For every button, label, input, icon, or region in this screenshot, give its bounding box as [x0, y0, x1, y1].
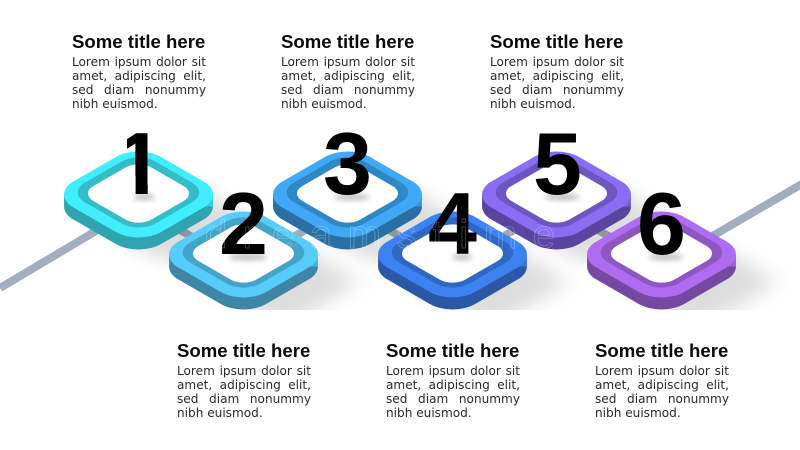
tile shadows	[128, 188, 774, 310]
text block 4: sed diam nonummy	[386, 392, 520, 406]
text block 2	[177, 340, 311, 420]
tile 6	[574, 204, 749, 317]
text block 6: Some title here	[595, 340, 728, 361]
tile 1	[51, 144, 226, 257]
number 1: 1	[115, 114, 164, 213]
text block 5: Lorem ipsum dolor sit	[490, 55, 624, 69]
text block 5: amet, adipiscing elit,	[490, 69, 624, 83]
text block 6: Lorem ipsum dolor sit	[595, 364, 729, 378]
text block 3: amet, adipiscing elit,	[281, 69, 415, 83]
tile 3	[260, 144, 435, 257]
text block 4: amet, adipiscing elit,	[386, 378, 520, 392]
tile 4	[365, 204, 540, 317]
text block 2: nibh euismod.	[177, 406, 263, 420]
text block 3: Some title here	[281, 31, 414, 52]
text block 5: sed diam nonummy	[490, 83, 624, 97]
text block 5: nibh euismod.	[490, 97, 576, 111]
text block 3	[281, 31, 415, 111]
text block 6: nibh euismod.	[595, 406, 681, 420]
text block 6: sed diam nonummy	[595, 392, 729, 406]
text block 4: Lorem ipsum dolor sit	[386, 364, 520, 378]
text block 4: nibh euismod.	[386, 406, 472, 420]
text block 5: Some title here	[490, 31, 623, 52]
watermark: dreamstime	[205, 213, 555, 257]
text block 1: sed diam nonummy	[72, 83, 206, 97]
text block 3: nibh euismod.	[281, 97, 367, 111]
digit shadows	[133, 194, 684, 260]
number 4: 4	[428, 174, 477, 273]
text block 6: amet, adipiscing elit,	[595, 378, 729, 392]
text block 1: nibh euismod.	[72, 97, 158, 111]
text block 1	[72, 31, 206, 111]
number 3: 3	[323, 114, 372, 213]
number 5: 5	[533, 114, 582, 213]
text block 2: Some title here	[177, 340, 310, 361]
text block 2: amet, adipiscing elit,	[177, 378, 311, 392]
tile 5	[469, 144, 644, 257]
text block 3: Lorem ipsum dolor sit	[281, 55, 415, 69]
tile 2	[156, 204, 331, 317]
number 6: 6	[637, 174, 686, 273]
connecting line	[0, 184, 800, 288]
text block 2: Lorem ipsum dolor sit	[177, 364, 311, 378]
text block 6	[595, 340, 729, 420]
text block 3: sed diam nonummy	[281, 83, 415, 97]
text block 4	[386, 340, 520, 420]
number 2: 2	[219, 174, 268, 273]
text block 5	[490, 31, 624, 111]
text block 4: Some title here	[386, 340, 519, 361]
text block 1: Some title here	[72, 31, 205, 52]
text block 1: Lorem ipsum dolor sit	[72, 55, 206, 69]
text block 1: amet, adipiscing elit,	[72, 69, 206, 83]
text block 2: sed diam nonummy	[177, 392, 311, 406]
